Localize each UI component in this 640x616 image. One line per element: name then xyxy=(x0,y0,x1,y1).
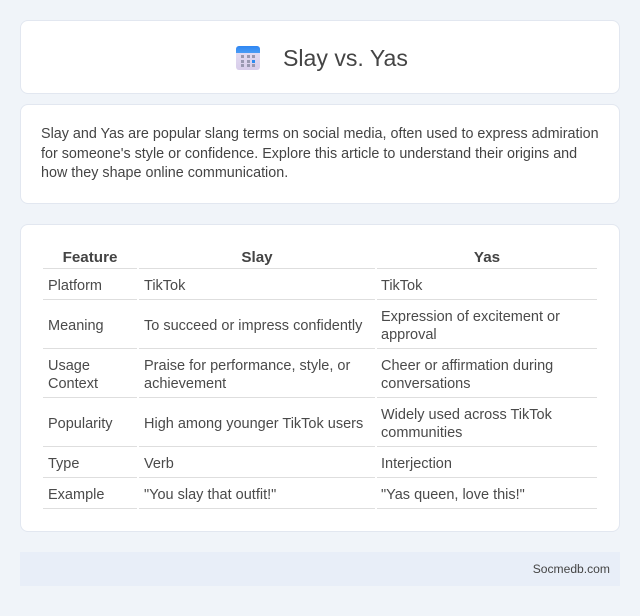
row: Usage Context: Praise for performance, style, or xyxy=(144,358,350,374)
row: Usage Context xyxy=(43,358,597,398)
intro text: how they shape online communication. xyxy=(41,165,288,181)
intro text: for someone's style or confidence. Explore this article to understand their origins and xyxy=(41,146,577,162)
row: Popularity xyxy=(43,407,597,447)
row: Platform xyxy=(43,278,597,300)
row: Meaning: approval xyxy=(381,327,437,343)
row: Popularity: Popularity xyxy=(48,416,112,432)
table header row xyxy=(43,249,597,269)
row: Platform: TikTok xyxy=(381,278,422,294)
row: Usage Context: Usage xyxy=(48,358,90,374)
row: Usage Context: Cheer or affirmation during xyxy=(381,358,553,374)
table card xyxy=(20,224,620,532)
row: Popularity: Widely used across TikTok xyxy=(381,407,552,423)
row: Type xyxy=(43,456,597,478)
row: Example: "You slay that outfit!" xyxy=(144,487,276,503)
row: Type: Interjection xyxy=(381,456,452,472)
row: Example: "Yas queen, love this!" xyxy=(381,487,525,503)
intro text: Slay and Yas are popular slang terms on social media, often used to express admiration xyxy=(41,126,599,142)
footer text: Socmedb.com xyxy=(533,562,610,576)
intro text xyxy=(41,126,599,181)
row: Meaning: Meaning xyxy=(48,318,104,334)
row: Meaning: Expression of excitement or xyxy=(381,309,560,325)
row: Example xyxy=(43,487,597,509)
footer bar xyxy=(20,552,620,586)
row: Type: Verb xyxy=(144,456,174,472)
row: Type: Type xyxy=(48,456,79,472)
table header row: Feature xyxy=(63,249,117,266)
row: Usage Context: Context xyxy=(48,376,98,392)
table header row: Yas xyxy=(474,249,500,266)
table header row: Slay xyxy=(241,249,273,266)
row: Meaning xyxy=(43,309,597,349)
row: Popularity: communities xyxy=(381,425,462,441)
icon: calendar xyxy=(236,46,260,70)
title: Slay vs. Yas xyxy=(283,45,408,71)
title card xyxy=(20,20,620,94)
row: Usage Context: achievement xyxy=(144,376,226,392)
row: Usage Context: conversations xyxy=(381,376,470,392)
row: Meaning: To succeed or impress confidently xyxy=(144,318,362,334)
row: Platform: Platform xyxy=(48,278,102,294)
row: Popularity: High among younger TikTok users xyxy=(144,416,363,432)
row: Platform: TikTok xyxy=(144,278,185,294)
row: Example: Example xyxy=(48,487,104,503)
intro card xyxy=(20,104,620,204)
